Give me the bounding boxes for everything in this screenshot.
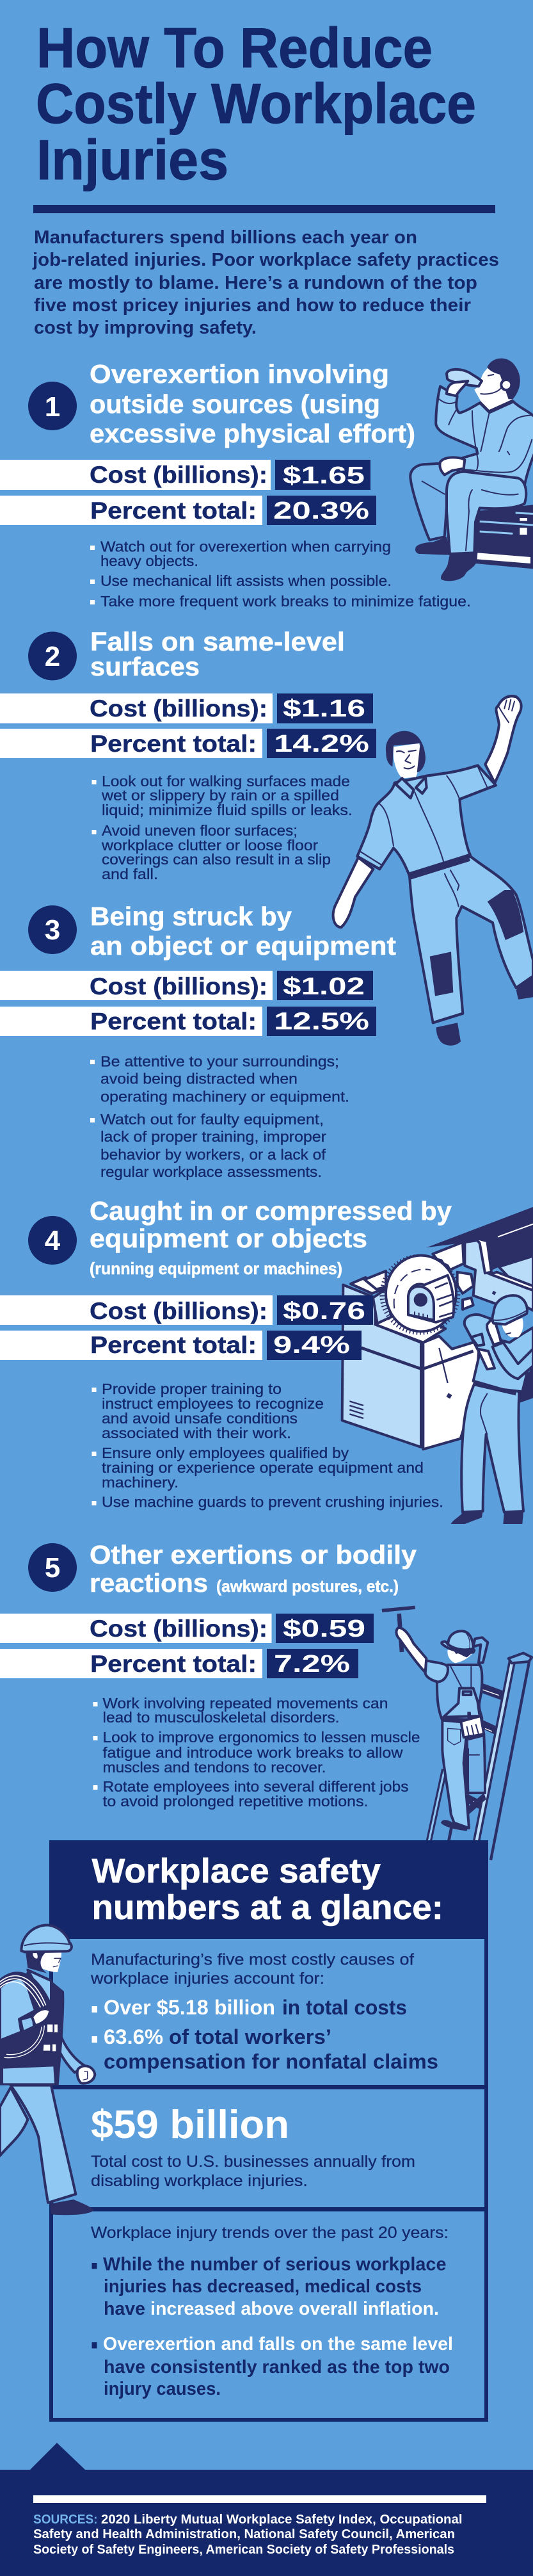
bullets 2: wet or slippery by rain or a spilled: [101, 787, 339, 804]
bullets 5: Rotate employees into several different jobs: [102, 1778, 408, 1795]
number badge 5: 5: [45, 1552, 60, 1584]
cost bar 2: Cost (billions):: [90, 695, 267, 722]
cost bar 4: Cost (billions):: [90, 1298, 267, 1324]
bullets 5: lead to musculoskeletal disorders.: [102, 1709, 339, 1726]
intro text: job-related injuries. Poor workplace safety practices: [32, 250, 499, 270]
heading 1: excessive physical effort): [90, 419, 415, 448]
cost bar 5: [0, 1614, 374, 1643]
panel: workplace safety numbers: [49, 1840, 488, 2420]
title: Costly Workplace: [36, 72, 476, 135]
bullets 3: operating machinery or equipment.: [100, 1089, 349, 1105]
bullets 4: machinery.: [102, 1474, 179, 1491]
bullets 1: Take more frequent work breaks to minimize fatigue.: [100, 593, 471, 610]
percent bar 4: [0, 1331, 362, 1360]
number badge 3: 3: [45, 914, 60, 946]
stat block: trends: Workplace injury trends over the past 20 years:: [91, 2224, 449, 2242]
bullets 4: [92, 1381, 443, 1510]
cost bar 1: $1.65: [283, 462, 365, 489]
cost bar 3: [0, 971, 373, 1000]
sources: Safety and Health Administration, National Safety Council, American: [33, 2527, 455, 2541]
cost bar 2: [0, 693, 373, 724]
percent bar 5: Percent total:: [90, 1651, 257, 1677]
bullets 3: avoid being distracted when: [100, 1071, 298, 1087]
cost bar 5: $0.59: [283, 1616, 365, 1642]
bullets 4: and avoid unsafe conditions: [102, 1410, 298, 1427]
illustration: worker on ladder with squeegee: [382, 1607, 532, 1860]
bullets 5: Work involving repeated movements can: [102, 1695, 388, 1712]
heading 1: [90, 359, 415, 448]
stat block: trends: have: [104, 2299, 145, 2319]
bullets 3: [90, 1053, 349, 1180]
percent bar 5: [0, 1649, 358, 1678]
bullets 4: Use machine guards to prevent crushing injuries.: [102, 1493, 443, 1510]
illustration: worker seated drinking water on toolbox: [410, 359, 533, 581]
bullets 2: Look out for walking surfaces made: [102, 773, 350, 790]
bullets 1: Use mechanical lift assists when possible.: [100, 572, 392, 589]
bullets 4: Ensure only employees qualified by: [102, 1445, 349, 1461]
number badge 5: [28, 1543, 77, 1592]
stat block: trends: [91, 2224, 453, 2399]
bullets 4: Provide proper training to: [102, 1381, 282, 1397]
bullets 5: [93, 1695, 420, 1810]
bullets 5: to avoid prolonged repetitive motions.: [102, 1793, 369, 1810]
stat block: five causes: 63.6%: [104, 2025, 163, 2048]
stat block: five causes: in total costs: [282, 1996, 407, 2019]
heading 2: Falls on same-level: [90, 627, 345, 656]
title: Injuries: [36, 128, 228, 191]
heading 5: (awkward postures, etc.): [216, 1576, 399, 1596]
panel heading: [49, 1840, 488, 1939]
intro text: cost by improving safety.: [34, 318, 257, 338]
bullets 4: training or experience operate equipment and: [102, 1459, 424, 1476]
section 4: caught in or compressed: [0, 1196, 452, 1510]
bullets 2: and fall.: [102, 866, 158, 882]
percent bar 4: Percent total:: [90, 1332, 257, 1358]
bullets 3: Be attentive to your surroundings;: [100, 1053, 339, 1069]
stat block: five causes: compensation for nonfatal claims: [104, 2050, 438, 2073]
heading 3: [90, 902, 396, 960]
stat block: trends: have consistently ranked as the top two: [104, 2357, 450, 2378]
bullets 2: Avoid uneven floor surfaces;: [102, 822, 298, 839]
stat block: five causes: workplace injuries account for:: [90, 1970, 324, 1988]
bullets 5: muscles and tendons to recover.: [102, 1759, 326, 1776]
heading 1: outside sources (using: [90, 389, 380, 419]
number badge 4: 4: [45, 1225, 61, 1256]
bullets 3: regular workplace assessments.: [100, 1163, 322, 1180]
bullets 1: [90, 538, 471, 610]
bullets 2: [92, 773, 353, 882]
bullets 3: lack of proper training, improper: [100, 1128, 326, 1145]
percent bar 1: 20.3%: [273, 498, 369, 524]
section 3: struck by object: [0, 902, 396, 1180]
cost bar 1: Cost (billions):: [90, 462, 267, 488]
percent bar 2: Percent total:: [90, 731, 257, 757]
heading 3: an object or equipment: [90, 931, 396, 960]
number badge 3: [28, 905, 77, 954]
bullets 4: associated with their work.: [102, 1425, 291, 1441]
percent bar 5: 7.2%: [274, 1651, 350, 1678]
stat block: five causes: [90, 1950, 438, 2073]
stat block: trends: Overexertion and falls on the same level: [103, 2334, 453, 2354]
bullets 2: coverings can also result in a slip: [102, 851, 331, 868]
sources: 2020 Liberty Mutual Workplace Safety Index, Occupational: [101, 2513, 462, 2527]
intro text: [32, 227, 499, 338]
heading 4: (running equipment or machines): [90, 1259, 342, 1278]
stat block: trends: injury causes.: [104, 2379, 221, 2399]
intro text: are mostly to blame. Here’s a rundown of the top: [34, 273, 477, 293]
cost bar 3: Cost (billions):: [90, 973, 267, 1000]
illustration: worker slipping and falling: [333, 696, 533, 1046]
stat block: trends: While the number of serious workplace: [103, 2254, 447, 2274]
sources: Society of Safety Engineers, American Society of Safety Professionals: [33, 2543, 454, 2557]
heading 4: equipment or objects: [90, 1224, 367, 1253]
bullets 3: Watch out for faulty equipment,: [100, 1111, 324, 1128]
bullets 2: liquid; minimize fluid spills or leaks.: [102, 802, 353, 818]
stat block: 59 billion: [91, 2103, 415, 2190]
illustration: worker beside saw machine: [342, 1207, 533, 1524]
cost bar 3: $1.02: [283, 973, 365, 1000]
intro text: Manufacturers spend billions each year on: [34, 227, 417, 248]
cost bar 5: Cost (billions):: [90, 1616, 267, 1642]
percent bar 2: [0, 729, 376, 758]
percent bar 3: 12.5%: [274, 1008, 369, 1035]
footer: [0, 2443, 533, 2576]
percent bar 1: [0, 496, 376, 525]
cost bar 4: [0, 1295, 373, 1325]
section 5: other exertions: [0, 1540, 420, 1810]
heading 5: [90, 1540, 417, 1598]
panel heading: Workplace safety: [92, 1852, 381, 1890]
number badge 2: 2: [45, 641, 60, 672]
cost bar 4: $0.76: [283, 1298, 365, 1325]
heading 2: surfaces: [90, 652, 200, 681]
heading 5: Other exertions or bodily: [90, 1540, 417, 1569]
panel heading: numbers at a glance:: [92, 1888, 443, 1927]
stat block: 59 billion: $59 billion: [91, 2103, 289, 2147]
stat block: five causes: Over $5.18 billion: [104, 1996, 275, 2019]
bullets 1: Watch out for overexertion when carrying: [100, 538, 391, 555]
number badge 4: [28, 1216, 77, 1265]
bullets 1: heavy objects.: [100, 553, 198, 569]
percent bar 2: 14.2%: [274, 731, 369, 757]
sources: SOURCES:: [33, 2513, 97, 2527]
intro text: five most pricey injuries and how to reduce their: [34, 295, 471, 316]
percent bar 3: Percent total:: [90, 1008, 257, 1035]
title: How To Reduce: [36, 16, 433, 79]
number badge 2: [28, 631, 77, 680]
bullets 5: fatigue and introduce work breaks to allow: [102, 1744, 404, 1761]
sources: [33, 2513, 462, 2557]
stat block: 59 billion: Total cost to U.S. businesses annually from: [91, 2153, 415, 2171]
section 1: overexertion: [0, 359, 471, 610]
bullets 5: Look to improve ergonomics to lessen muscle: [102, 1729, 420, 1746]
stat block: five causes: of total workers’: [169, 2025, 331, 2048]
percent bar 4: 9.4%: [273, 1332, 350, 1359]
bullets 3: behavior by workers, or a lack of: [100, 1146, 326, 1163]
illustration: worker walking with coiled cable: [0, 1925, 95, 2215]
section 2: falls: [0, 627, 376, 882]
title: [36, 16, 476, 191]
heading 1: Overexertion involving: [90, 359, 389, 389]
heading 2: [90, 627, 345, 681]
number badge 1: [28, 382, 77, 430]
number badge 1: 1: [45, 391, 60, 423]
stat block: trends: injuries has decreased, medical costs: [104, 2276, 422, 2297]
heading 5: reactions: [90, 1568, 208, 1598]
cost bar 1: [0, 460, 370, 490]
cost bar 2: $1.16: [283, 695, 365, 722]
stat block: 59 billion: disabling workplace injuries.: [91, 2172, 308, 2190]
stat block: five causes: Manufacturing’s five most costly causes of: [91, 1950, 414, 1968]
heading 4: Caught in or compressed by: [90, 1196, 452, 1226]
footer arrow: [30, 2443, 85, 2470]
heading 4: [90, 1196, 452, 1278]
percent bar 1: Percent total:: [90, 498, 257, 524]
stat block: trends: increased above overall inflation.: [150, 2299, 439, 2319]
bullets 4: instruct employees to recognize: [102, 1395, 324, 1412]
percent bar 3: [0, 1007, 376, 1036]
heading 3: Being struck by: [90, 902, 292, 931]
bullets 2: workplace clutter or loose floor: [101, 837, 318, 854]
